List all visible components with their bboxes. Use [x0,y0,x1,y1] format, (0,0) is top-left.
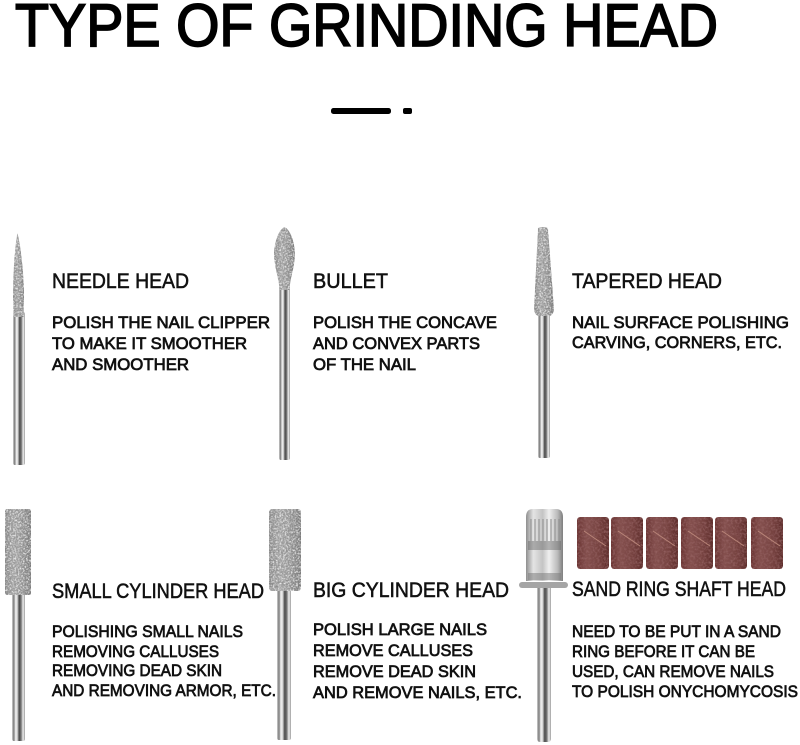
description: big cylinder head: REMOVE DEAD SKIN [313,662,476,681]
heading: bullet: BULLET [313,270,388,293]
description: small cylinder head: REMOVING DEAD SKIN [52,661,222,680]
icon: needle head bit [13,233,25,465]
description: sand ring shaft head: NEED TO BE PUT IN A SAND [572,622,781,641]
description: tapered head: CARVING, CORNERS, ETC. [572,333,782,352]
panel: big cylinder head [269,509,522,740]
description: big cylinder head: REMOVE CALLUSES [313,641,473,660]
description: needle head: POLISH THE NAIL CLIPPER [52,313,270,332]
description: needle head: AND SMOOTHER [52,355,189,374]
description: small cylinder head: AND REMOVING ARMOR, ETC. [52,681,276,700]
description: small cylinder head: POLISHING SMALL NAILS [52,622,243,641]
description: bullet [313,313,497,374]
title divider mark [331,108,412,114]
description: sand ring shaft head [572,622,798,701]
panel: sand ring shaft head [519,509,798,742]
description: sand ring shaft head: RING BEFORE IT CAN BE [572,642,755,661]
panel: needle head [13,233,270,465]
description: bullet: OF THE NAIL [313,355,416,374]
icon: big cylinder bit [269,509,301,740]
description: needle head: TO MAKE IT SMOOTHER [52,334,247,353]
description: big cylinder head: AND REMOVE NAILS, ETC. [313,683,522,702]
panel: bullet [274,227,497,460]
description: small cylinder head [52,622,276,700]
description: big cylinder head [313,620,522,702]
icon: sanding bands [577,517,783,569]
heading: small cylinder head: SMALL CYLINDER HEAD [52,580,264,603]
description: big cylinder head: POLISH LARGE NAILS [313,620,487,639]
description: needle head [52,313,270,374]
description: bullet: POLISH THE CONCAVE [313,313,497,332]
panel: tapered head [534,227,789,458]
panel: small cylinder head [5,509,276,741]
description: bullet: AND CONVEX PARTS [313,334,480,353]
description: sand ring shaft head: USED, CAN REMOVE NAILS [572,662,774,681]
description: small cylinder head: REMOVING CALLUSES [52,642,219,661]
heading: tapered head: TAPERED HEAD [572,270,722,293]
icon: small cylinder bit [5,509,31,741]
icon: bullet bit [274,227,295,460]
heading: needle head: NEEDLE HEAD [52,270,189,293]
icon: tapered bit [534,227,554,458]
icon: mandrel shaft [519,509,568,742]
description: tapered head: NAIL SURFACE POLISHING [572,313,789,332]
heading: big cylinder head: BIG CYLINDER HEAD [313,579,509,602]
description: tapered head [572,313,789,352]
